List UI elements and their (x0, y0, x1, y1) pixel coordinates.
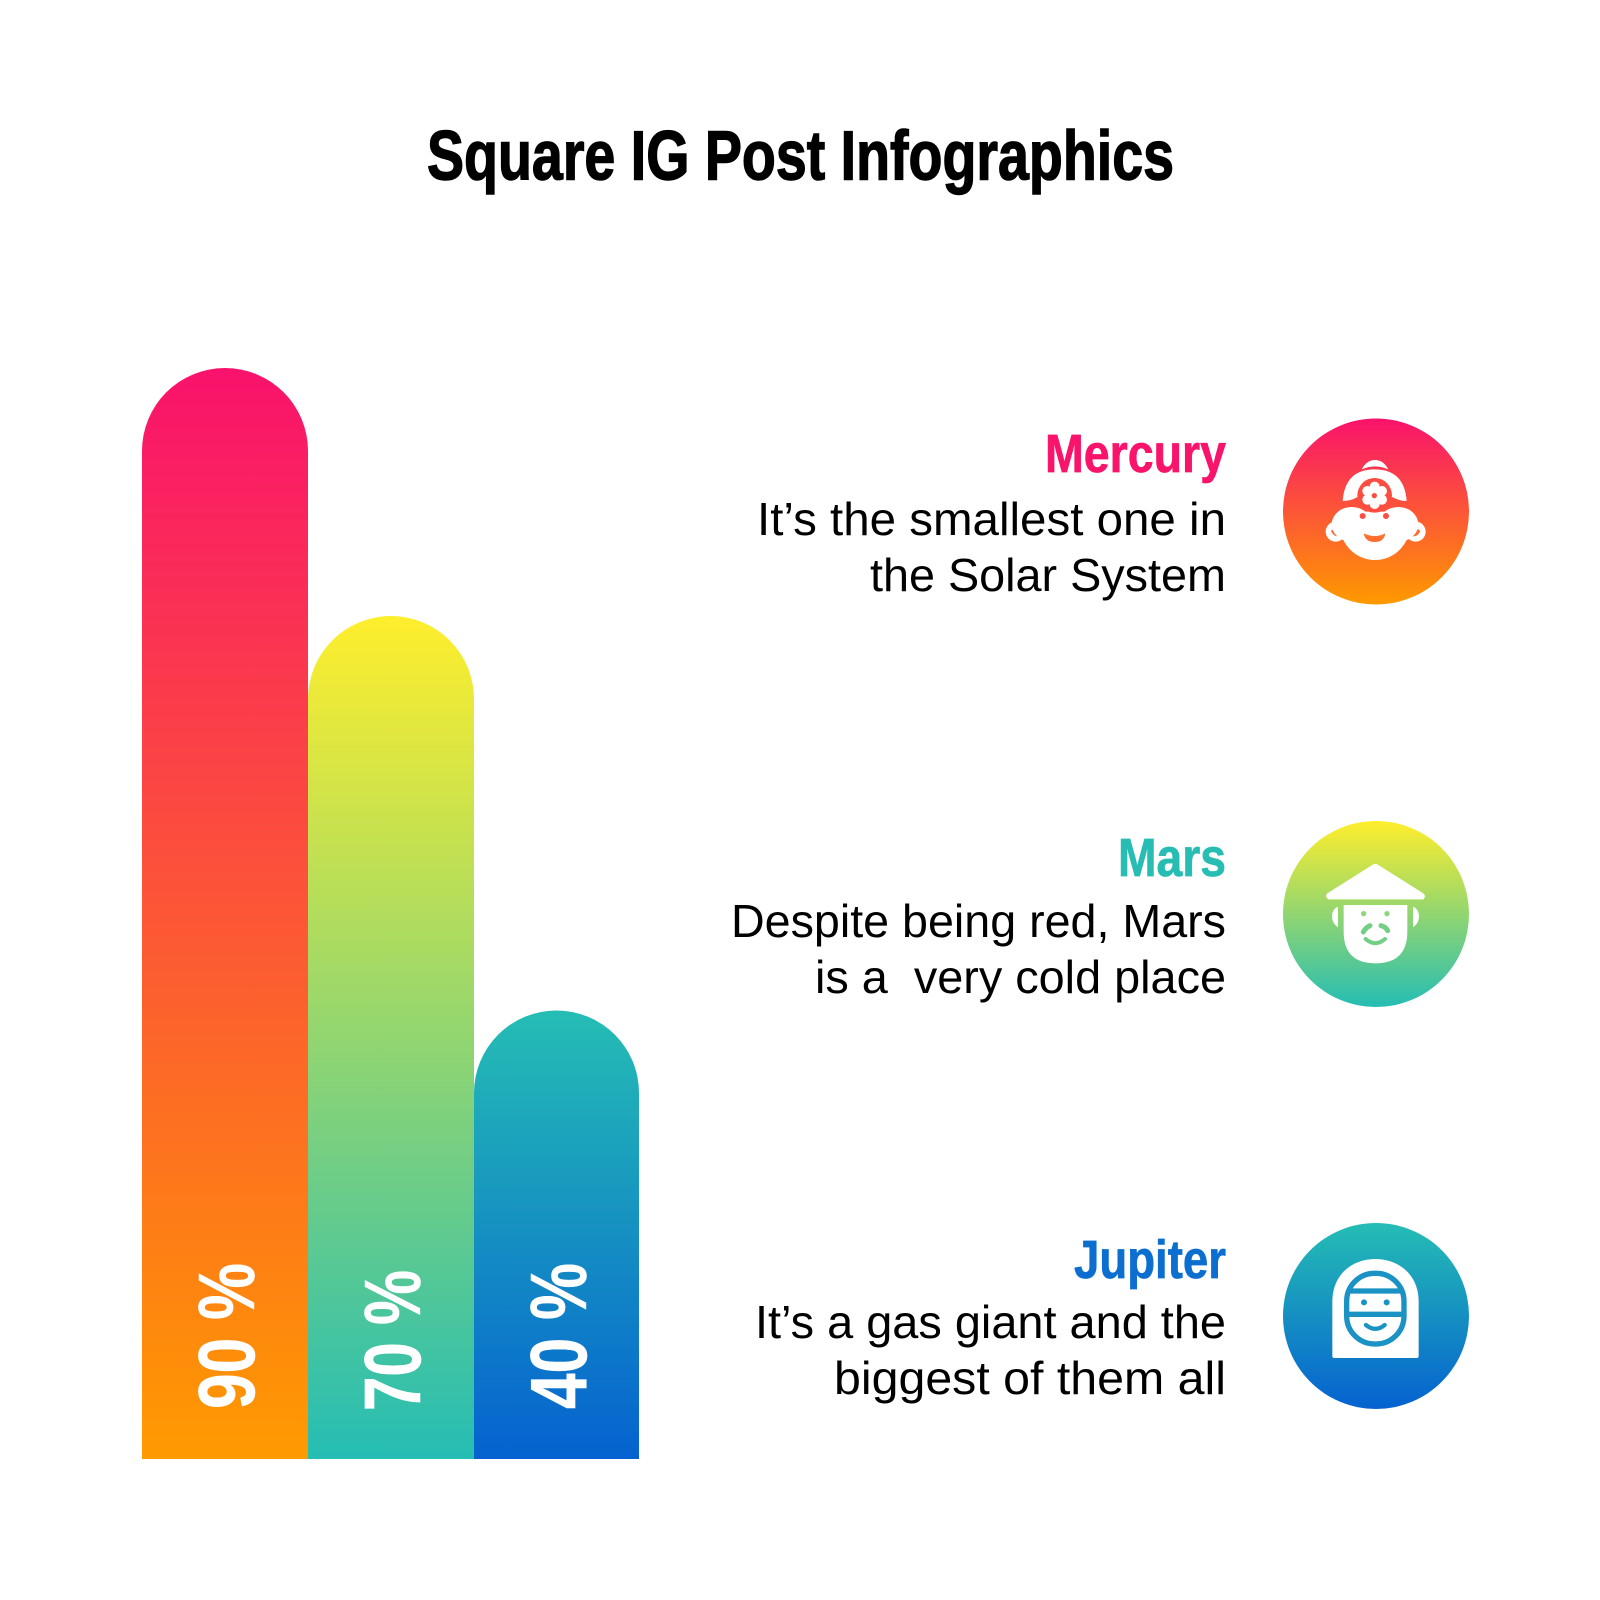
text: Jupiter description (755, 1296, 1226, 1404)
item: Mercury (757, 418, 1469, 604)
text: Mercury description (757, 493, 1226, 601)
heading: Mars: Mars (1118, 828, 1226, 888)
title: Square IG Post Infographics (427, 116, 1174, 194)
text: Mars description: Despite being red, Mars (731, 895, 1226, 947)
bar: 90%: 90 % (182, 1263, 271, 1409)
text: Mercury description: the Solar System (870, 549, 1226, 601)
icon: man with conical hat (1283, 821, 1469, 1007)
heading: Jupiter: Jupiter (1074, 1230, 1226, 1290)
icon: girl with flower (1283, 418, 1469, 604)
bar: 70% (308, 616, 474, 1459)
icon: ninja (1283, 1223, 1469, 1409)
item: Jupiter (755, 1223, 1469, 1409)
text: Mars description (731, 895, 1226, 1003)
bar: 40% (474, 1010, 639, 1459)
bar: 90% (142, 368, 308, 1459)
heading: Mercury: Mercury (1045, 424, 1226, 484)
bar: 70%: 70 % (348, 1270, 437, 1411)
item: Mars (731, 821, 1469, 1007)
text: Jupiter description: It’s a gas giant and the (755, 1296, 1226, 1348)
text: Jupiter description: biggest of them all (834, 1352, 1226, 1404)
text: Mercury description: It’s the smallest one in (757, 493, 1226, 545)
bar: 40%: 40 % (514, 1263, 603, 1409)
text: Mars description: is a very cold place (815, 951, 1226, 1003)
bar chart (142, 368, 639, 1459)
